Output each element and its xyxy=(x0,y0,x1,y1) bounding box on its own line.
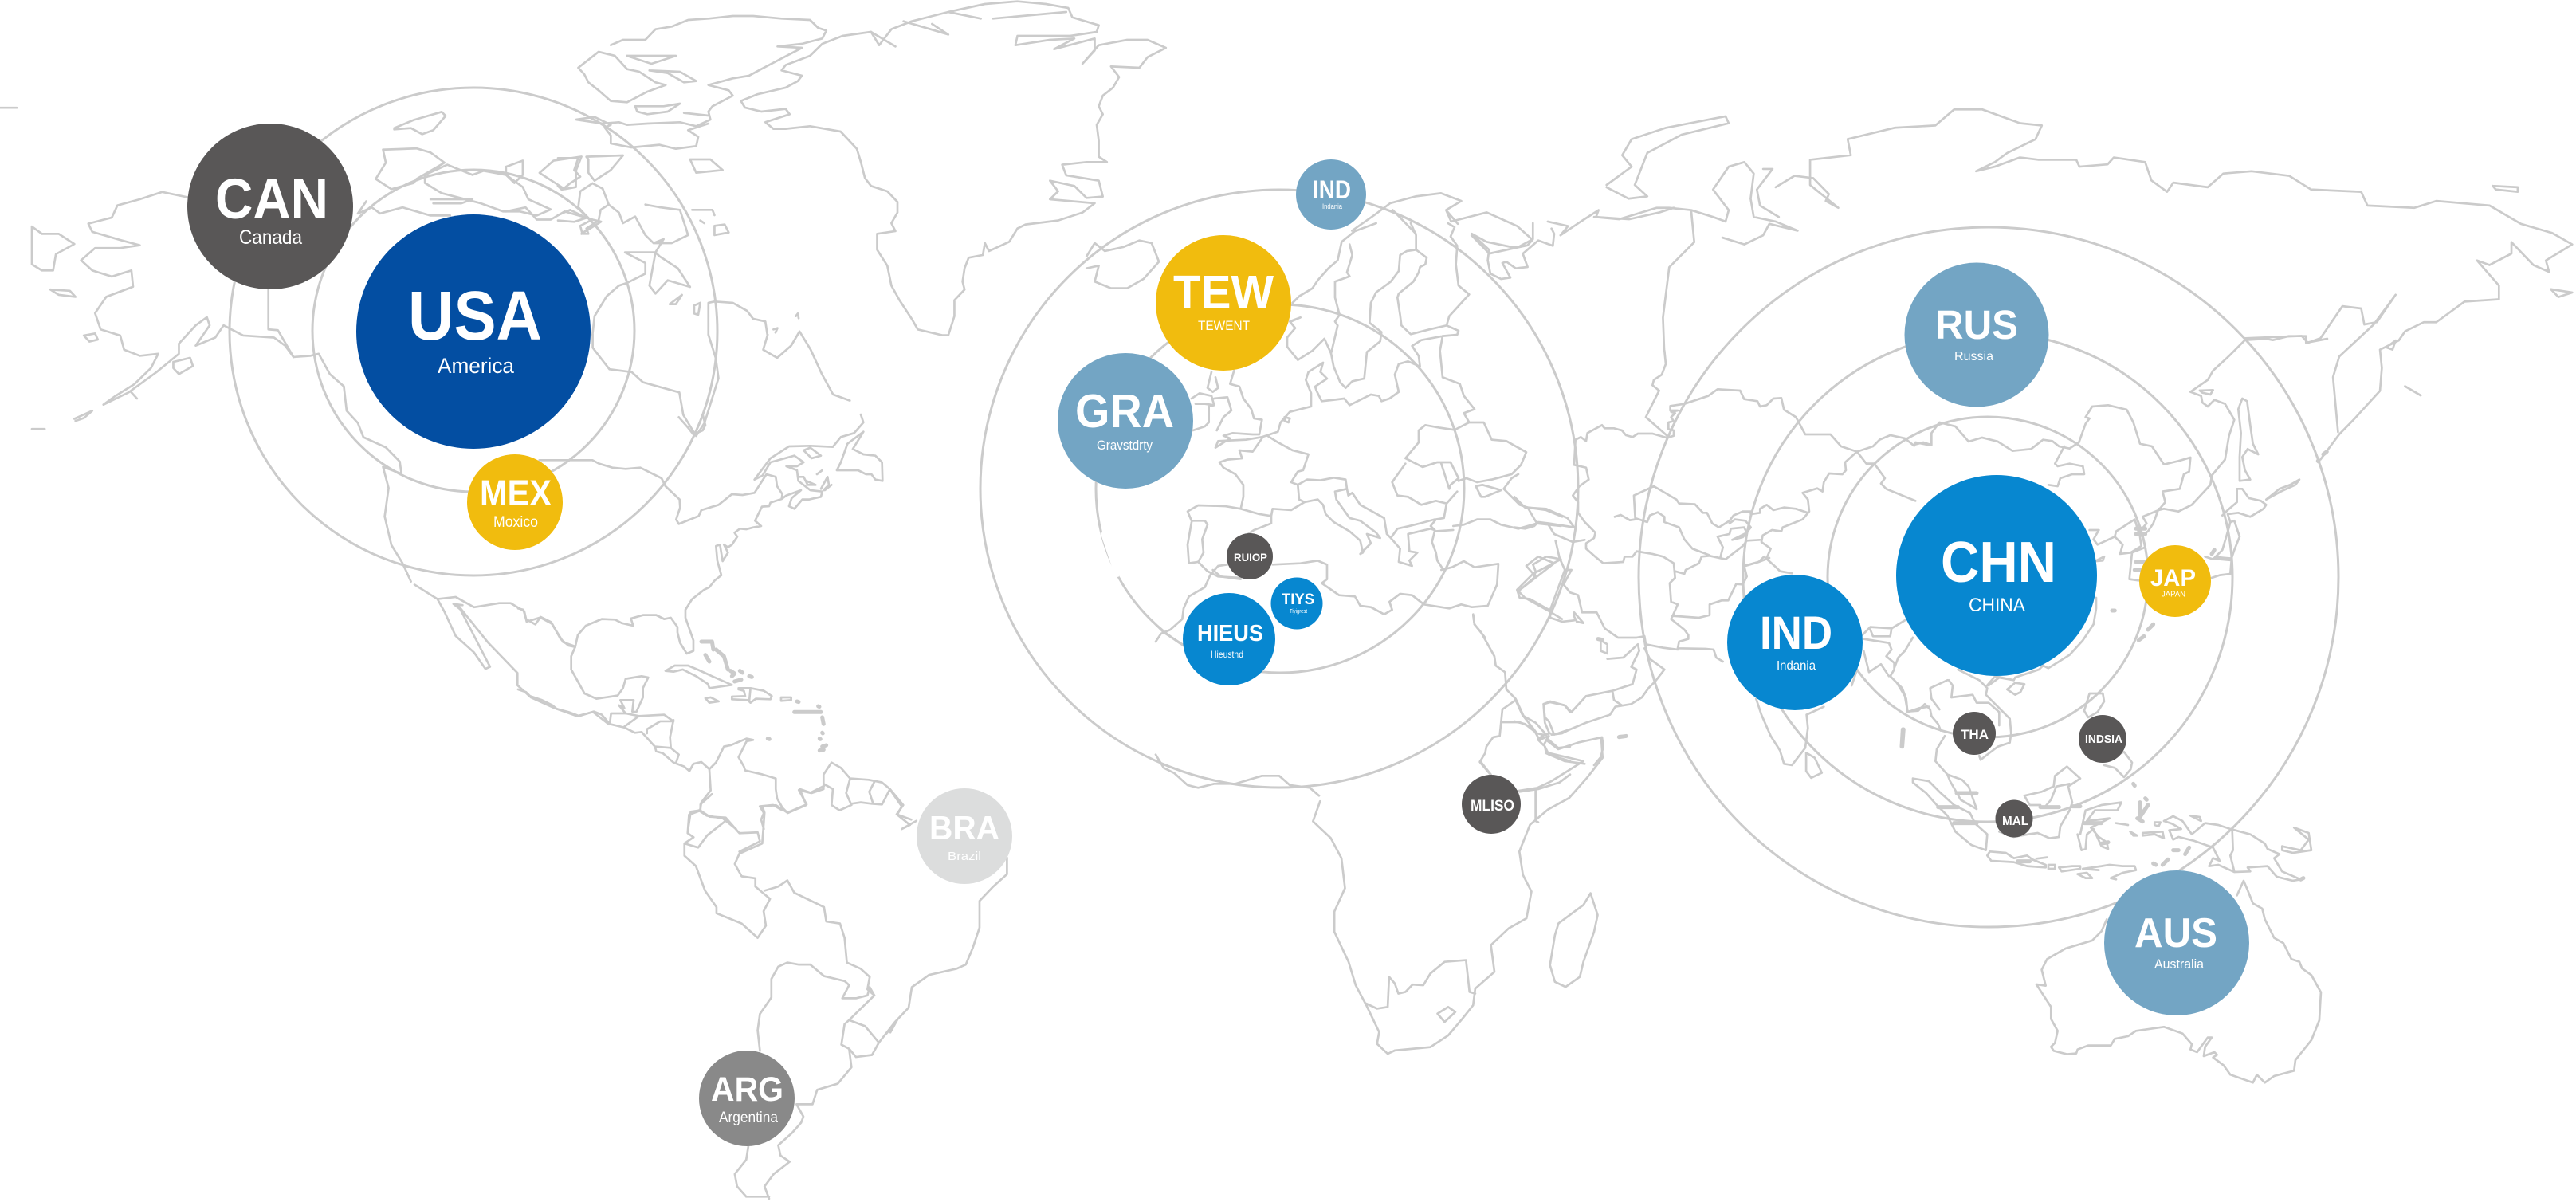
map: Arctic islands and Greenland xyxy=(558,2,1166,336)
name: Hieustnd: Hieustnd xyxy=(1211,649,1243,660)
map: Alaska and western Canada xyxy=(0,108,850,582)
name: Indania: Indania xyxy=(1322,202,1342,210)
map: eastern North America, Central America, Caribbean xyxy=(518,414,911,829)
code: TIYS: TIYS xyxy=(1282,591,1314,608)
bubble: India xyxy=(1727,575,1863,710)
map: South America xyxy=(414,584,1007,1199)
code: RUIOP: RUIOP xyxy=(1234,551,1267,564)
bubble: GRA xyxy=(1058,353,1193,489)
name: Tiyigrest: Tiyigrest xyxy=(1290,609,1307,615)
code: IND: IND xyxy=(1760,607,1832,659)
name: Brazil: Brazil xyxy=(948,850,981,863)
bubble: USA xyxy=(356,214,591,449)
bubble: Brazil xyxy=(917,788,1012,884)
name: Canada: Canada xyxy=(239,226,302,249)
map: Middle East and Central Asia xyxy=(1514,351,1929,765)
name: America: America xyxy=(438,354,515,378)
bubble: TEW xyxy=(1156,235,1291,371)
code: BRA: BRA xyxy=(929,809,999,847)
code: MLISO: MLISO xyxy=(1471,798,1514,815)
bubble: TIYS xyxy=(1270,577,1323,630)
bubble: Canada xyxy=(187,124,353,289)
map: Africa, north and centre xyxy=(1156,560,1570,823)
name: JAPAN: JAPAN xyxy=(2162,590,2185,599)
code: MAL: MAL xyxy=(2002,815,2028,828)
range rings: Asia xyxy=(1639,227,2338,927)
map: East Asia and Japan xyxy=(1913,336,2327,695)
code: RUS: RUS xyxy=(1935,302,2018,348)
bubble: Russia xyxy=(1905,263,2048,407)
code: THA: THA xyxy=(1961,727,1989,742)
code: AUS: AUS xyxy=(2134,910,2217,956)
code: HIEUS: HIEUS xyxy=(1197,621,1263,646)
bubble: MAL xyxy=(1996,800,2032,837)
code: CHN: CHN xyxy=(1941,531,2056,595)
name: Argentina: Argentina xyxy=(719,1110,778,1126)
name: Russia: Russia xyxy=(1954,350,1993,363)
code: USA: USA xyxy=(408,277,542,355)
code: GRA: GRA xyxy=(1075,385,1174,438)
bubble: Australia xyxy=(2104,870,2249,1015)
map: southern Africa and Madagascar xyxy=(1313,736,1822,1054)
code: MEX: MEX xyxy=(480,473,552,513)
code: JAP: JAP xyxy=(2150,565,2196,591)
code: INDSIA: INDSIA xyxy=(2085,733,2122,746)
range rings: Europe xyxy=(980,190,1578,788)
name: Moxico: Moxico xyxy=(493,514,538,531)
name: CHINA: CHINA xyxy=(1969,595,2025,616)
name: TEWENT: TEWENT xyxy=(1198,318,1250,333)
name: Gravstdrty: Gravstdrty xyxy=(1097,438,1153,453)
name: Australia: Australia xyxy=(2154,956,2205,972)
name: Indania: Indania xyxy=(1777,659,1816,673)
map: Europe and Turkey xyxy=(1188,223,1562,638)
code: IND: IND xyxy=(1313,175,1351,204)
bubble: Japan xyxy=(2139,545,2211,617)
bubble: MLISO xyxy=(1462,775,1521,834)
range rings: North America xyxy=(230,88,717,575)
bubble: IND north xyxy=(1296,159,1366,230)
bubble: THA xyxy=(1953,712,1996,755)
code: TEW: TEW xyxy=(1173,266,1274,319)
bubble: RUIOP xyxy=(1227,533,1273,579)
bubble: HIEUS xyxy=(1183,593,1275,685)
code: CAN: CAN xyxy=(215,168,328,231)
map: Scandinavia and north Russia coast xyxy=(1352,193,1674,253)
code: ARG: ARG xyxy=(711,1070,783,1109)
map: Southeast Asia, New Guinea and Australia xyxy=(1897,670,2321,1082)
bubble: China xyxy=(1896,475,2097,676)
bubble: Mexico xyxy=(467,454,563,550)
bubble: Argentina xyxy=(699,1051,795,1146)
bubble: INDSIA xyxy=(2079,715,2126,763)
map: Russia, Siberia and Kamchatka xyxy=(1594,109,2572,459)
